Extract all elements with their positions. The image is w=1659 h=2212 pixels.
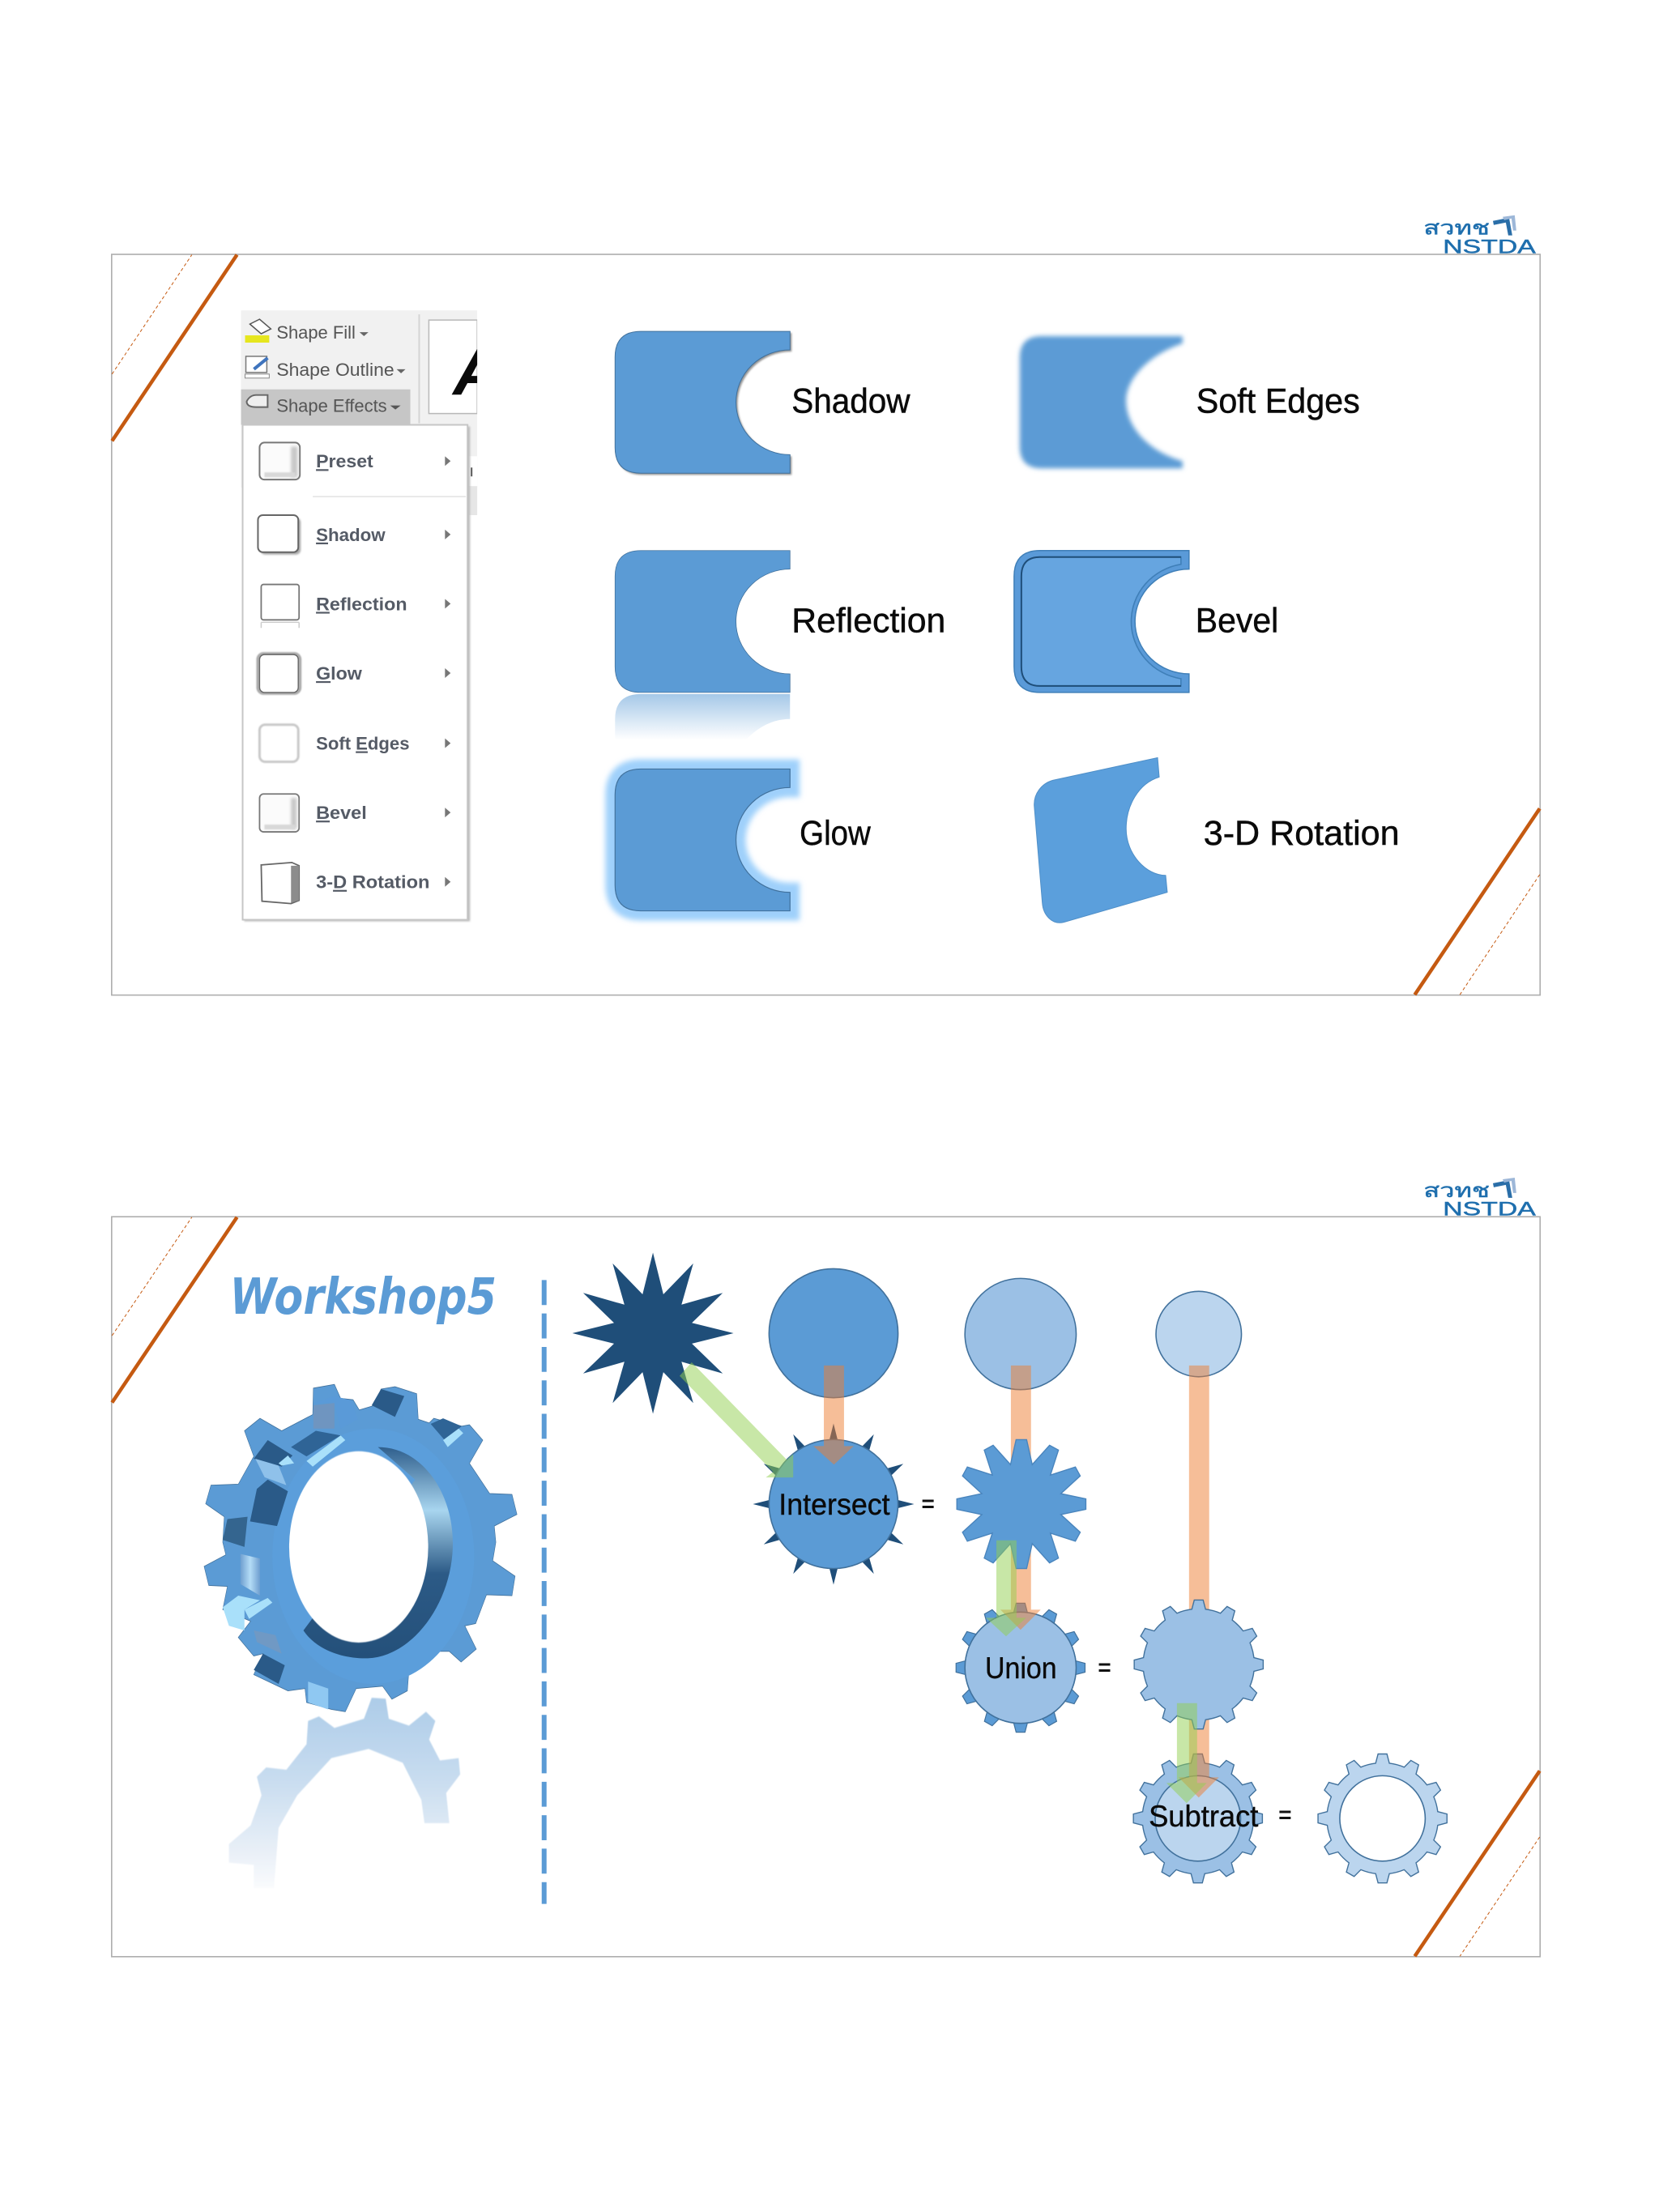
logo: NSTDA (1423, 215, 1536, 258)
shape: dark 12-point star source (573, 1253, 734, 1414)
shape: bevel example (1014, 551, 1189, 693)
label: soft edges: Soft Edges (1196, 382, 1360, 421)
shape: glow example (615, 769, 790, 911)
shape: union result gear (1134, 1600, 1263, 1729)
intersect: star behind circle (753, 1423, 914, 1585)
decoration: top-left orange stripe (112, 255, 237, 441)
menu item: preset (259, 442, 450, 479)
arrow: green to union (986, 1541, 1026, 1636)
icon: shape outline pencil (245, 356, 269, 378)
label: intersect: Intersect (778, 1488, 890, 1521)
ribbon label: shape fill: Shape Fill (276, 322, 356, 343)
equals sign: = (1278, 1802, 1292, 1827)
3D gear with reflection (204, 1384, 517, 1888)
menu item: 3-D rotation: 3-D Rotation (316, 872, 429, 893)
result: ring gear with hole (1318, 1754, 1447, 1883)
divider: dashed vertical line (542, 1280, 547, 1904)
intersect: circle (769, 1439, 898, 1569)
decoration: top-left orange stripe (112, 1217, 237, 1403)
menu item: reflection (261, 585, 450, 628)
label: shadow: Shadow (791, 382, 911, 421)
shape: circle 3 (1156, 1291, 1242, 1377)
logo: NSTDA (1423, 1178, 1536, 1221)
logo: NSTDA: NSTDA (1443, 237, 1536, 258)
shape: shadow example (615, 331, 791, 475)
label: reflection: Reflection (791, 601, 945, 640)
shape: reflection example (615, 551, 790, 740)
union: gear behind circle (956, 1603, 1085, 1733)
label: subtract: Subtract (1149, 1800, 1258, 1833)
menu item: preset: Preset (316, 451, 374, 471)
shape effects dropdown menu (243, 425, 470, 922)
decoration: bottom-right orange stripe (1414, 1771, 1540, 1956)
menu item: soft edges (259, 725, 450, 761)
dropdown arrow (397, 369, 406, 373)
gear tooth faces (223, 1389, 463, 1709)
decoration: bottom-right orange stripe (1414, 808, 1540, 995)
menu item: glow (258, 654, 450, 693)
title: Workshop5: Workshop5 (230, 1268, 497, 1326)
shape: 3-D rotation example (1034, 757, 1167, 923)
menu item: bevel: Bevel (316, 803, 367, 823)
shape: circle 1 (769, 1268, 898, 1398)
gear hole (289, 1451, 429, 1643)
shape: circle 2 (965, 1278, 1077, 1390)
slide 1 frame (112, 254, 1540, 995)
arrow: orange to subtract (1179, 1366, 1219, 1797)
equals sign: = (1098, 1655, 1111, 1680)
menu item: reflection: Reflection (316, 594, 407, 614)
menu item: bevel (259, 794, 450, 832)
shape: soft edges example (1020, 336, 1183, 468)
logo: NSTDA: สวทช (1423, 218, 1490, 240)
menu item: shadow: Shadow (316, 525, 386, 545)
label: union: Union (985, 1652, 1057, 1685)
gear front ring (272, 1429, 474, 1684)
label: 3-D rotation: 3-D Rotation (1204, 814, 1400, 853)
union: circle (965, 1612, 1077, 1724)
menu item: 3-D rotation (261, 863, 450, 904)
icon: shape fill bucket (245, 319, 271, 343)
arrow: orange to union (1000, 1366, 1041, 1630)
ribbon: shape styles group (241, 310, 510, 515)
subtract: circle (1155, 1775, 1241, 1861)
arrow: green to subtract (1166, 1703, 1207, 1803)
gear reflection (229, 1698, 460, 1888)
ribbon label: shape effects: Shape Effects (276, 396, 387, 416)
equals sign: = (921, 1491, 935, 1516)
subtract: gear (1133, 1754, 1262, 1883)
slide 2 frame (112, 1217, 1540, 1957)
logo: NSTDA: NSTDA (1443, 1199, 1536, 1221)
ribbon: shape styles group: A (451, 336, 501, 410)
ribbon label: shape outline: Shape Outline (276, 360, 394, 380)
arrow: green to intersect (680, 1362, 793, 1477)
arrow: orange to intersect (813, 1366, 854, 1464)
slide 2: workshop 5 (112, 1178, 1540, 1957)
slide 1: shape effects (112, 215, 1540, 995)
shape: intersect result gear star (957, 1439, 1085, 1569)
gear back silhouette (204, 1384, 517, 1711)
dropdown arrow (360, 332, 369, 336)
gear inner surface (304, 1447, 453, 1658)
icon: shape effects (247, 395, 267, 407)
menu item: soft edges: Soft Edges (316, 734, 410, 754)
dropdown arrow (390, 406, 401, 410)
label: bevel: Bevel (1196, 601, 1278, 640)
menu item: shadow (258, 515, 450, 555)
menu item: glow: Glow (316, 663, 363, 684)
label: glow: Glow (800, 814, 871, 853)
logo: NSTDA: สวทช (1423, 1180, 1490, 1202)
